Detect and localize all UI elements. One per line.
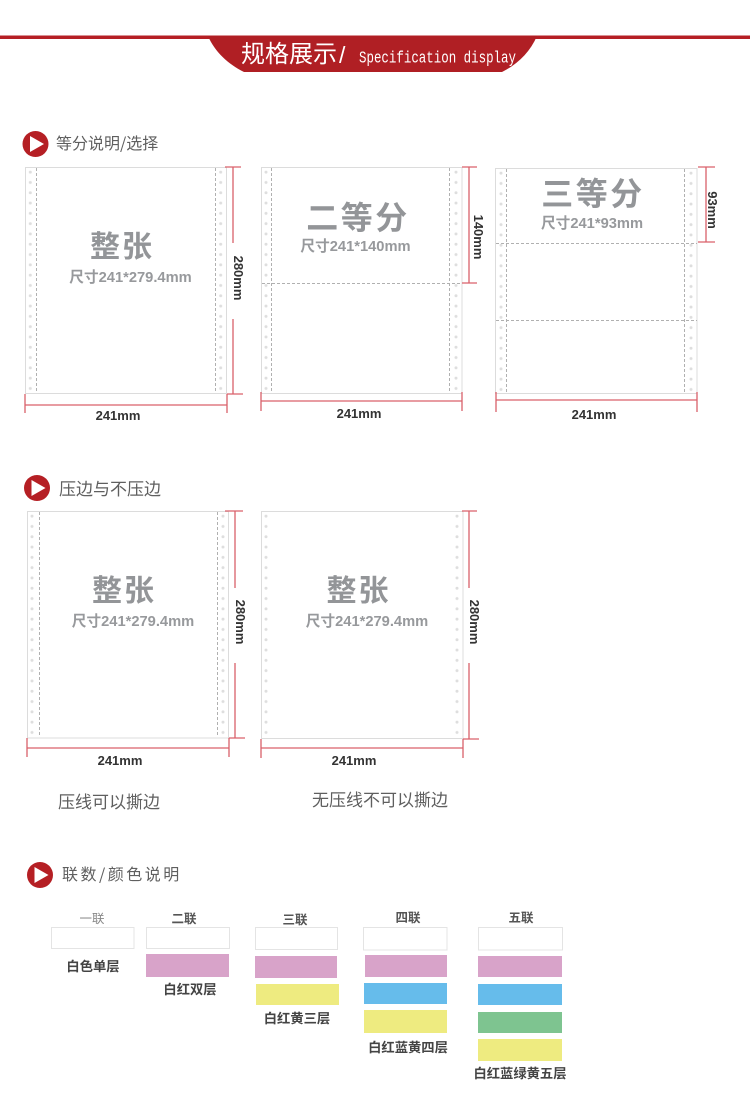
form: without pressed line: [260, 511, 482, 768]
form: whole sheet: 尺寸241*279.4mm: [69, 269, 192, 286]
form: three equal parts: 尺寸241*93mm: [541, 215, 643, 232]
section heading: 压边与不压边: 压边与不压边: [59, 475, 161, 500]
form: two equal parts: 140mm: [471, 215, 486, 259]
section heading: 等分说明/选择: 等分说明/选择: [56, 130, 158, 154]
form: without pressed line: 尺寸241*279.4mm: [306, 613, 428, 630]
swatch set: one-part: 白色单层: [66, 956, 120, 975]
swatch set: three-part: 白红黄三层: [264, 1008, 330, 1027]
header banner: Specification display: [359, 50, 516, 68]
caption: 无压线不可以撕边: 无压线不可以撕边: [312, 786, 448, 811]
swatch set: one-part: [52, 908, 134, 975]
form: without pressed line: 280mm: [467, 600, 482, 644]
form: two equal parts: [260, 167, 486, 421]
header banner: 规格展示: [241, 34, 337, 69]
form: whole sheet: [24, 167, 246, 423]
header banner: [0, 34, 750, 72]
form: three equal parts: 241mm: [572, 407, 616, 422]
form: whole sheet: 280mm: [231, 256, 246, 300]
swatch set: four-part: [364, 907, 448, 1056]
swatch set: four-part: 白红蓝黄四层: [368, 1037, 448, 1056]
form: three equal parts: 三等分: [541, 169, 645, 215]
swatch set: two-part: 二联: [171, 908, 197, 927]
swatch set: three-part: [255, 909, 339, 1027]
form: three equal parts: 93mm: [705, 191, 720, 229]
swatch set: four-part: 四联: [395, 907, 421, 926]
form: with pressed line: 尺寸241*279.4mm: [72, 613, 194, 630]
form: two equal parts: 二等分: [306, 193, 410, 239]
section heading: 联数/颜色说明: [27, 861, 182, 888]
swatch set: one-part: 一联: [79, 908, 105, 927]
form: three equal parts: [495, 167, 720, 422]
swatch set: five-part: [473, 907, 567, 1082]
swatch set: three-part: 三联: [282, 909, 308, 928]
form: with pressed line: 整张: [92, 566, 156, 610]
form: with pressed line: 280mm: [233, 600, 248, 644]
form: whole sheet: 整张: [90, 222, 154, 266]
swatch set: five-part: 五联: [508, 907, 534, 926]
form: two equal parts: 241mm: [337, 406, 381, 421]
form: with pressed line: [26, 511, 248, 768]
swatch set: five-part: 白红蓝绿黄五层: [473, 1063, 567, 1082]
section heading: 联数/颜色说明: 联数/颜色说明: [62, 861, 182, 885]
swatch set: two-part: 白红双层: [163, 979, 217, 998]
form: with pressed line: 241mm: [98, 753, 142, 768]
swatch set: two-part: [146, 908, 230, 998]
section heading: 等分说明/选择: [22, 130, 158, 157]
header banner: /: [339, 42, 346, 68]
form: two equal parts: 尺寸241*140mm: [300, 238, 411, 255]
form: without pressed line: 241mm: [332, 753, 376, 768]
form: whole sheet: 241mm: [96, 408, 140, 423]
form: without pressed line: 整张: [326, 566, 390, 610]
caption: 压线可以撕边: 压线可以撕边: [58, 788, 160, 813]
